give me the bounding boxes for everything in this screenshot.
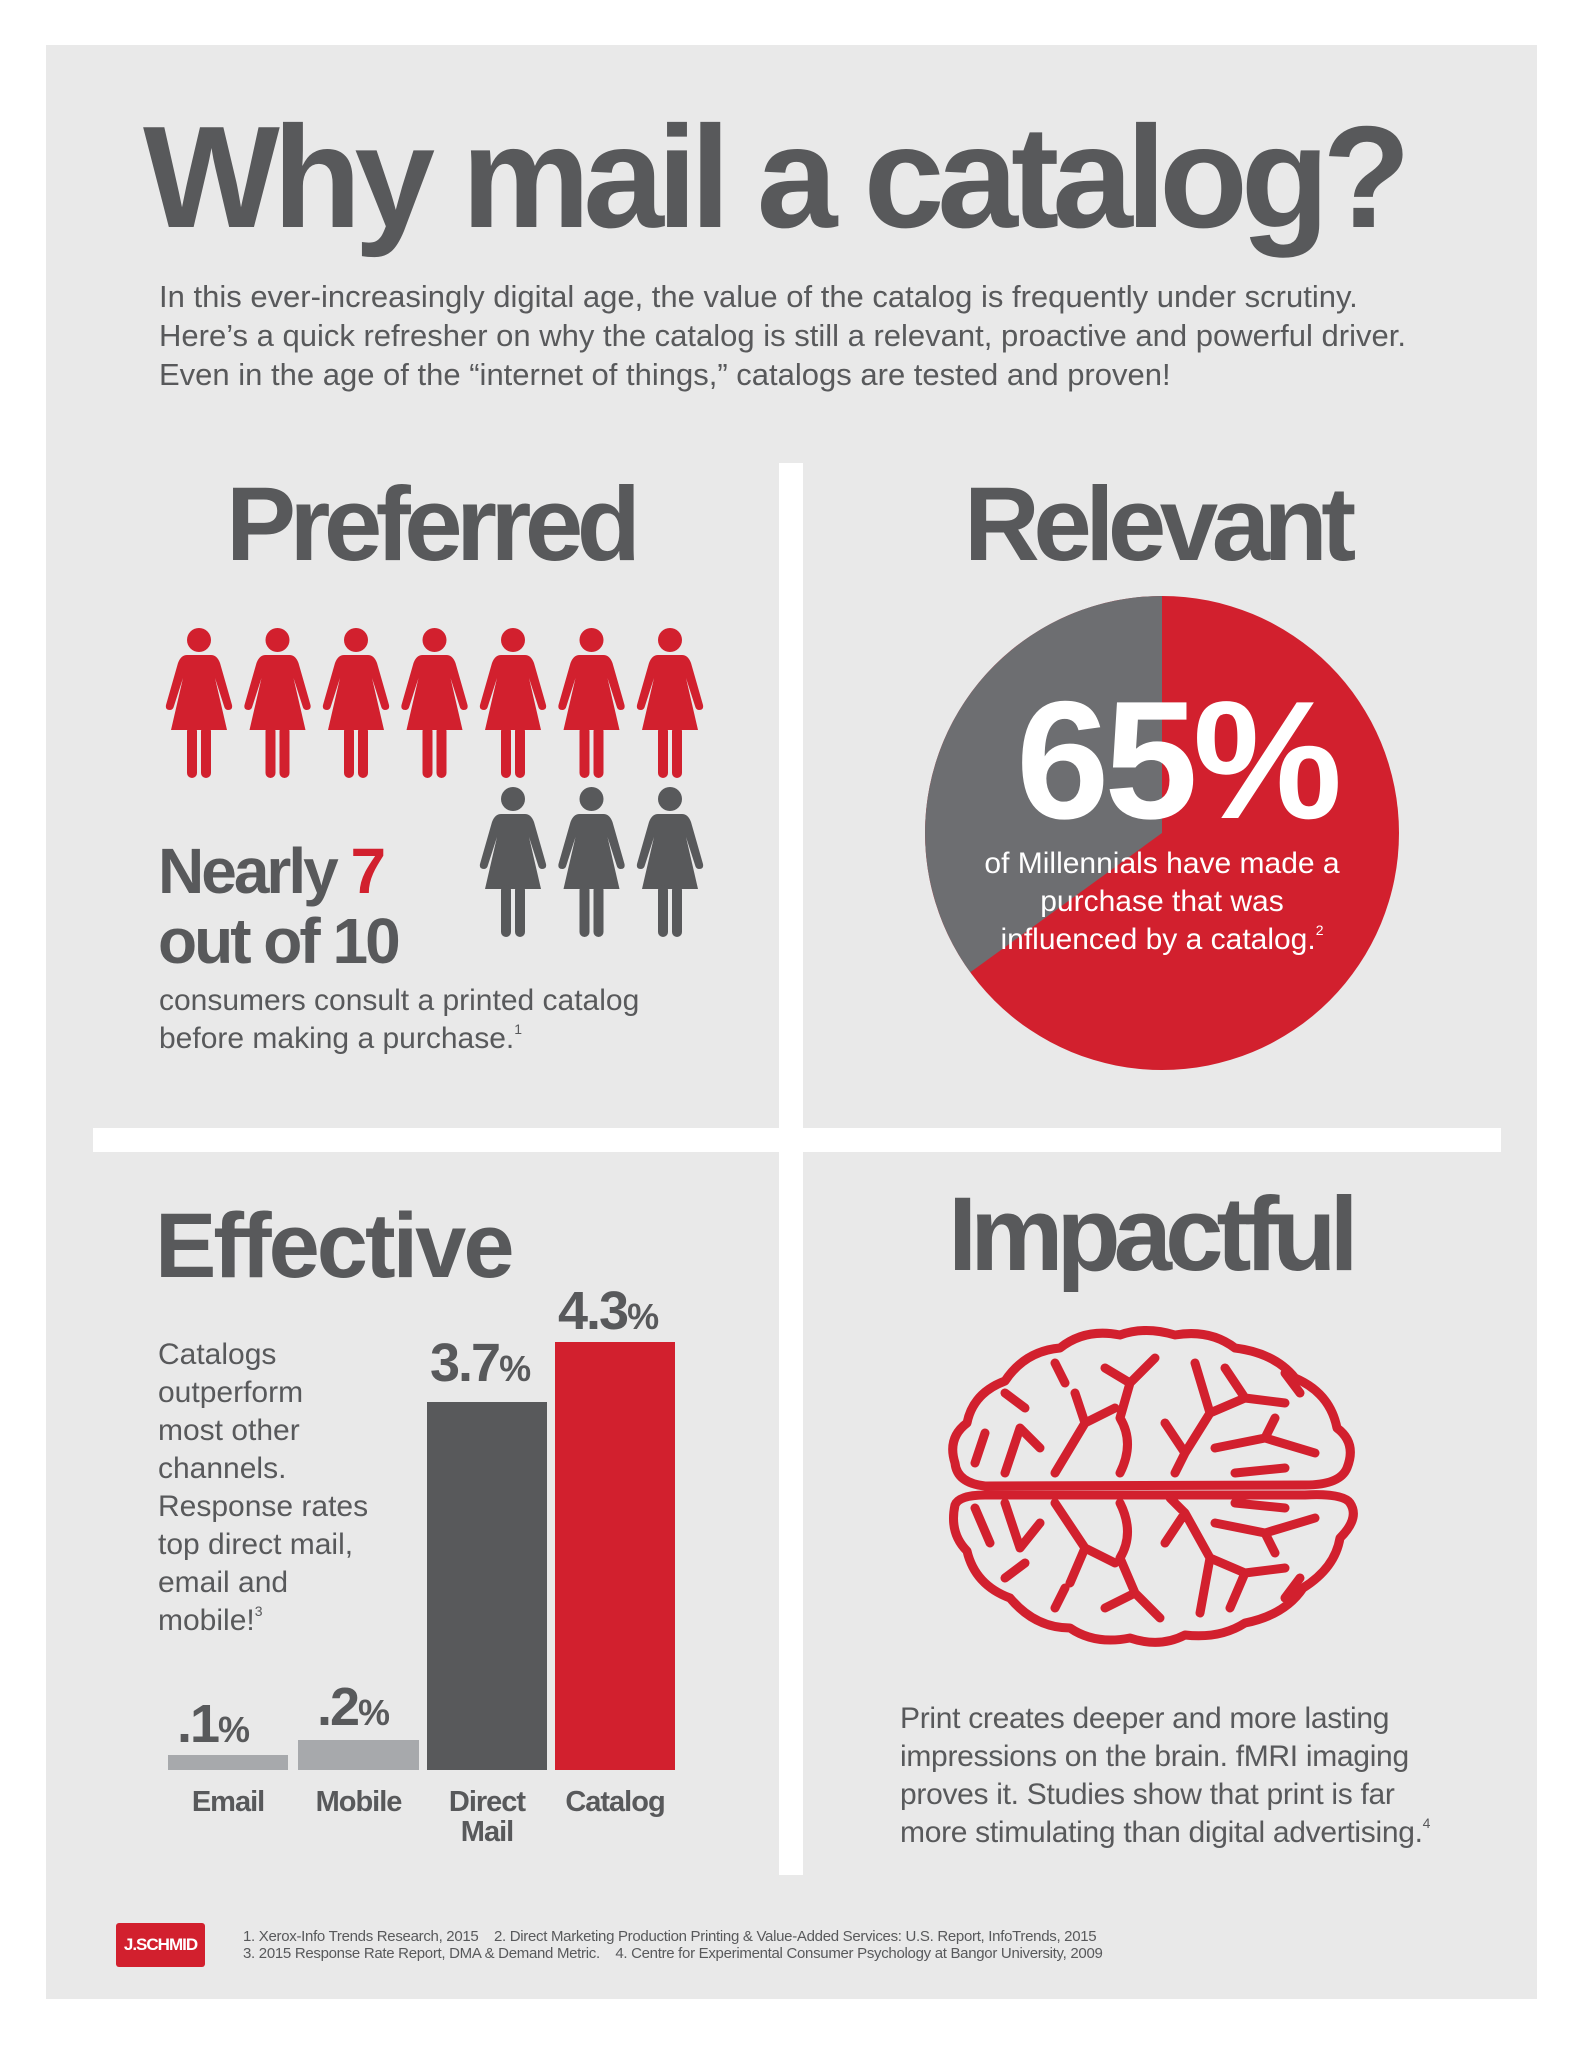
icon: women pictogram <box>166 628 704 937</box>
footer <box>116 1923 1103 1967</box>
text: print creates: Print creates deeper and more lasting <box>900 1702 1389 1735</box>
title: Why mail a catalog? <box>143 96 1404 258</box>
bar chart: Direct <box>449 1786 525 1818</box>
panel: relevant <box>925 466 1399 1070</box>
divider horizontal <box>93 1128 1501 1152</box>
text: print creates: proves it. Studies show that print is far <box>900 1778 1395 1811</box>
value: 3.7%: 3.7% <box>430 1333 529 1393</box>
intro text: Here’s a quick refresher on why the catalog is still a relevant, proactive and powerful driver. <box>159 318 1406 353</box>
footnotes: 1. Xerox-Info Trends Research, 2015 2. Direct Marketing Production Printing & Value-Added Services: U.S. Report, InfoTrends, 2015 <box>243 1928 1096 1945</box>
bar: catalog <box>555 1342 675 1770</box>
text: catalogs outperform: Response rates <box>158 1490 368 1523</box>
bar chart: Catalog <box>565 1786 665 1818</box>
text: catalogs outperform: Catalogs <box>158 1338 276 1371</box>
stat: nearly 7 out of 10: Nearly 7 <box>158 835 383 907</box>
footnotes <box>243 1928 1103 1962</box>
text: catalogs outperform: top direct mail, <box>158 1528 353 1561</box>
text: print creates: more stimulating than digital advertising.4 <box>900 1815 1430 1849</box>
text: consumers: before making a purchase.1 <box>159 1021 522 1055</box>
stat: 65%: 65% <box>1016 666 1337 854</box>
bar: direct mail <box>427 1402 547 1770</box>
logo: J.SCHMID: J.SCHMID <box>124 1935 197 1954</box>
panel: preferred <box>158 466 704 1055</box>
value: .1%: .1% <box>177 1694 248 1754</box>
heading: preferred: Preferred <box>226 466 634 583</box>
text: millennials <box>984 847 1340 956</box>
text: catalogs outperform <box>158 1338 368 1637</box>
bar: email <box>168 1755 288 1770</box>
intro text <box>159 279 1406 392</box>
stat: nearly 7 out of 10 <box>158 835 398 977</box>
divider vertical <box>779 463 803 1875</box>
pie chart 65% <box>925 596 1399 1070</box>
text: print creates: impressions on the brain. fMRI imaging <box>900 1740 1409 1773</box>
intro text: Even in the age of the “internet of things,” catalogs are tested and proven! <box>159 357 1171 392</box>
intro text: In this ever-increasingly digital age, the value of the catalog is frequently under scrutiny. <box>159 279 1358 314</box>
bar chart: Mail <box>461 1816 513 1848</box>
text: millennials: of Millennials have made a <box>984 847 1340 880</box>
text: catalogs outperform: most other <box>158 1414 300 1447</box>
panel: effective <box>155 1195 675 1848</box>
bar: mobile <box>298 1740 419 1770</box>
heading: relevant: Relevant <box>964 466 1350 583</box>
text: print creates <box>900 1702 1430 1849</box>
value: .2%: .2% <box>317 1677 388 1737</box>
text: catalogs outperform: mobile!3 <box>158 1603 263 1637</box>
text: catalogs outperform: outperform <box>158 1376 303 1409</box>
footnotes: 3. 2015 Response Rate Report, DMA & Demand Metric. 4. Centre for Experimental Consumer Psychology at Bangor University, 2009 <box>243 1945 1103 1962</box>
text: consumers: consumers consult a printed catalog <box>159 984 639 1017</box>
bar chart: Mobile <box>316 1786 401 1818</box>
text: millennials: purchase that was <box>1040 885 1284 918</box>
value: 4.3%: 4.3% <box>558 1281 657 1341</box>
text: catalogs outperform: channels. <box>158 1452 286 1485</box>
heading: effective: Effective <box>155 1195 512 1297</box>
text: consumers <box>159 984 639 1055</box>
bar chart: Email <box>192 1786 264 1818</box>
bar chart <box>168 1281 675 1848</box>
icon: brain <box>948 1326 1358 1647</box>
text: catalogs outperform: email and <box>158 1566 288 1599</box>
logo: J.SCHMID <box>116 1923 205 1967</box>
heading: impactful: Impactful <box>948 1176 1352 1293</box>
panel: impactful <box>900 1176 1430 1849</box>
text: millennials: influenced by a catalog.2 <box>1000 922 1324 956</box>
stat: nearly 7 out of 10: out of 10 <box>158 905 398 977</box>
labels <box>192 1786 665 1848</box>
